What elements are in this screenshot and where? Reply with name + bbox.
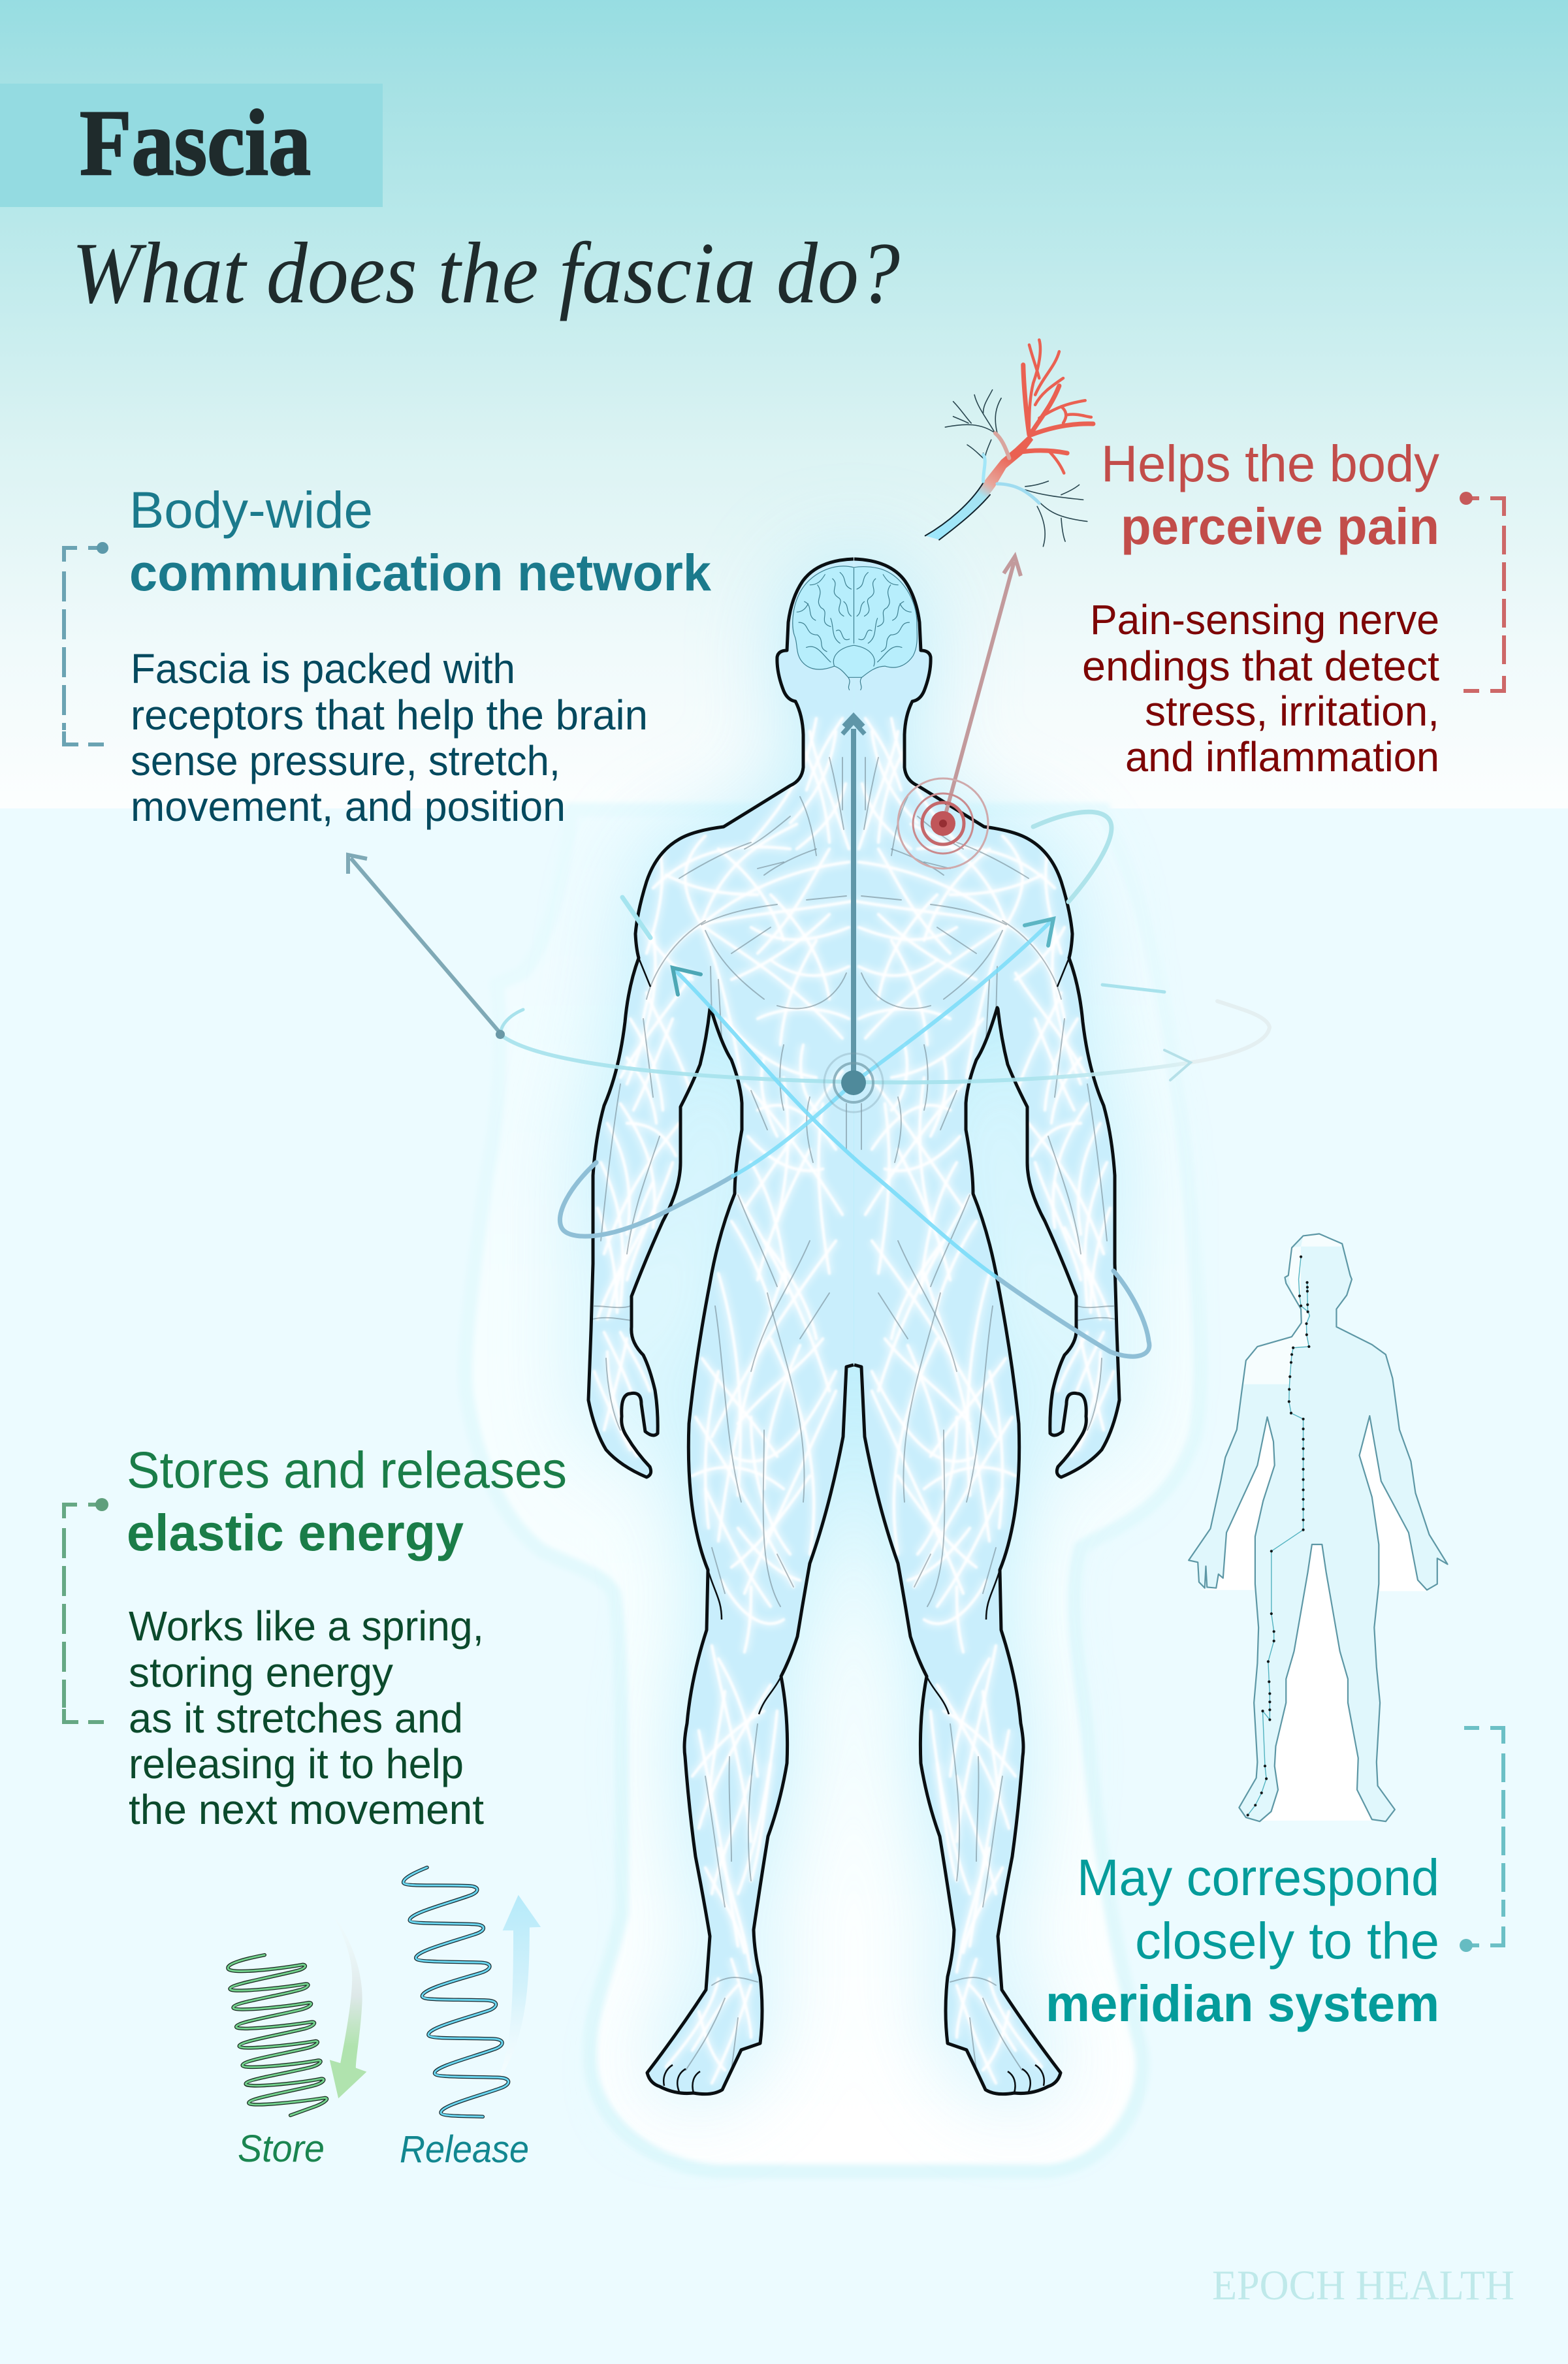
bracket [1460, 492, 1504, 691]
body text: as it stretches and [129, 1695, 463, 1742]
body text: the next movement [129, 1786, 484, 1833]
heading: perceive pain [1121, 497, 1439, 555]
heading: May correspond [1077, 1848, 1439, 1906]
bracket [64, 1498, 108, 1722]
body figure [588, 559, 1119, 2094]
body text: Pain-sensing nerve [1090, 596, 1439, 643]
heading: elastic energy [127, 1503, 464, 1561]
bracket [64, 542, 108, 744]
body text: receptors that help the brain [131, 692, 648, 739]
pain arrow [943, 556, 1021, 823]
body text: stress, irritation, [1145, 688, 1439, 735]
body text: storing energy [129, 1649, 393, 1696]
halo around body [465, 810, 1200, 2171]
body text: endings that detect [1082, 643, 1439, 690]
body text [1082, 596, 1439, 780]
body text [129, 1603, 484, 1833]
body text: Works like a spring, [129, 1603, 484, 1650]
heading: Body-wide [129, 481, 373, 539]
background: upper gradient [0, 0, 1568, 810]
subtitle: What does the fascia do? [72, 225, 900, 321]
heading [129, 481, 712, 601]
logo: Epoch Health: EPOCH HEALTH [1212, 2262, 1514, 2309]
body text: sense pressure, stretch, [131, 737, 560, 784]
heading [1101, 434, 1439, 555]
heading: Stores and releases [127, 1441, 567, 1499]
abdominal target [824, 1053, 883, 1112]
icon: nerve endings [925, 340, 1093, 547]
orbit: rising diagonal ring [560, 812, 1112, 1236]
label: store: Store [238, 2128, 325, 2170]
icon: stretched blue spring with release arrow [404, 1868, 541, 2116]
heading: Helps the body [1101, 434, 1439, 492]
heading: communication network [129, 543, 712, 601]
label: release: Release [400, 2128, 529, 2171]
body text: Fascia is packed with [131, 645, 515, 692]
panel: perceive pain [1082, 434, 1504, 780]
panel: meridian system [1046, 1728, 1503, 2032]
body text: releasing it to help [129, 1740, 464, 1787]
heading [1046, 1848, 1439, 2032]
panel: elastic energy [64, 1441, 567, 1833]
panel: communication network [64, 481, 712, 830]
bracket [1460, 1728, 1503, 1952]
body text: movement, and position [131, 783, 566, 830]
body glow [588, 559, 1119, 2094]
pain target [898, 778, 988, 869]
icon: meridian figure [1189, 1234, 1448, 1821]
orbit: falling diagonal ring [622, 897, 1149, 1356]
title box [0, 84, 383, 207]
orbit: horizontal ring [501, 985, 1270, 1083]
background: lower field [0, 808, 1568, 2364]
icon: compressed green spring with store arrow [228, 1913, 366, 2115]
arrow: spine up to brain [842, 716, 865, 1083]
arrow: to communication text [348, 855, 505, 1039]
heading: meridian system [1046, 1974, 1439, 2032]
heading [127, 1441, 567, 1561]
title box: Fascia [80, 91, 311, 195]
body text [131, 645, 648, 830]
heading: closely to the [1135, 1911, 1439, 1970]
brain [793, 566, 917, 690]
body text: and inflammation [1125, 733, 1439, 780]
